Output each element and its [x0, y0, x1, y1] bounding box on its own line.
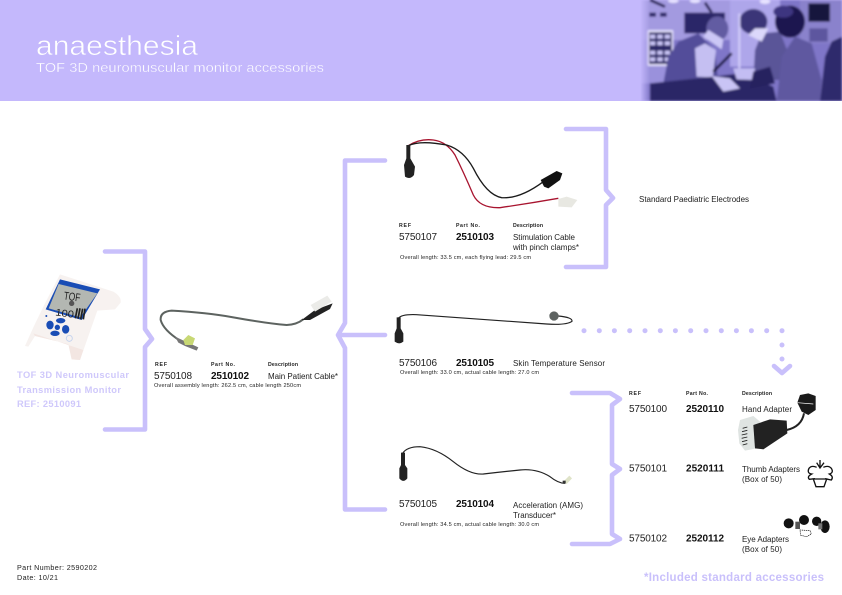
panel: main patient cable: Part No. [211, 362, 236, 368]
eye adapters row: 5750102 [629, 534, 667, 544]
icon: TOF 3D monitor device: TOF [63, 290, 81, 305]
panel: adapters [629, 391, 832, 554]
thumb adapters row: (Box of 50) [742, 475, 782, 484]
eye adapters row [629, 534, 789, 554]
panel: acceleration transducer: 2510104 [456, 499, 494, 510]
panel: main patient cable: 5750108 [154, 371, 192, 382]
panel: skin temperature sensor: 5750106 [399, 358, 437, 369]
icon: eye adapters [784, 515, 830, 537]
panel: main patient cable: Overall assembly length: 262.5 cm, cable length 250cm [154, 383, 301, 389]
text block: standard paediatric electrodes: Standard Paediatric Electrodes [639, 195, 749, 204]
panel: acceleration transducer: Transducer* [513, 511, 556, 520]
thumb adapters row: Thumb Adapters [742, 465, 800, 474]
panel: acceleration transducer: Acceleration (AMG) [513, 501, 583, 510]
header photo: operating theatre team [640, 0, 842, 101]
panel: stimulation cable [399, 140, 579, 261]
eye adapters row: 2520112 [686, 534, 724, 544]
panel: acceleration transducer: 5750105 [399, 499, 437, 510]
hand adapter row: 2520110 [686, 404, 724, 415]
header band [0, 0, 842, 101]
panel: skin temperature sensor: Skin Temperature Sensor [513, 359, 605, 368]
icon: stimulation cable with pinch clamps [404, 140, 577, 208]
panel: main patient cable: 2510102 [211, 371, 249, 382]
panel: skin temperature sensor [395, 311, 605, 376]
panel: stimulation cable: REF [399, 223, 411, 229]
panel: main patient cable [154, 296, 338, 389]
panel: stimulation cable: 5750107 [399, 232, 437, 243]
bracket: transducer to adapters [572, 393, 620, 544]
hand adapter row [629, 404, 792, 415]
monitor name and REF: REF: 2510091 [17, 399, 81, 409]
panel: main patient cable: Description [268, 362, 298, 368]
icon: main patient cable [161, 296, 333, 351]
hand adapter row: Hand Adapter [742, 405, 792, 414]
panel: acceleration transducer [399, 447, 583, 528]
monitor name and REF: Transmission Monitor [17, 385, 121, 395]
panel: main patient cable: REF [155, 362, 167, 368]
dotted arrow: temperature sensor to adapters [582, 328, 790, 373]
hand adapter row: 5750100 [629, 404, 667, 415]
bracket: stimulation cable to electrodes [566, 129, 613, 267]
icon: skin temperature sensor [395, 311, 572, 343]
eye adapters row: Eye Adapters [742, 535, 789, 544]
panel: stimulation cable: Description [513, 223, 543, 229]
panel: skin temperature sensor: Overall length: 33.0 cm, actual cable length: 27.0 cm [400, 370, 539, 376]
panel: adapters: Description [742, 391, 772, 397]
icon: TOF 3D monitor device: 100 [55, 307, 75, 321]
panel: main patient cable: Main Patient Cable* [268, 372, 338, 381]
icon: acceleration transducer [399, 447, 572, 484]
bracket: monitor to main cable [105, 252, 152, 430]
panel: stimulation cable: Overall length: 33.5 cm, each flying lead: 29.5 cm [400, 255, 531, 261]
panel: stimulation cable: with pinch clamps* [512, 243, 579, 252]
thumb adapters row: 5750101 [629, 464, 667, 474]
panel: adapters: Part No. [686, 391, 709, 397]
panel: skin temperature sensor: 2510105 [456, 358, 494, 369]
thumb adapters row [629, 464, 800, 484]
thumb adapters row: 2520111 [686, 464, 724, 474]
monitor name and REF: TOF 3D Neuromuscular [17, 370, 129, 380]
panel: adapters: REF [629, 391, 641, 397]
panel: stimulation cable: Part No. [456, 223, 481, 229]
icon: hand adapter [738, 393, 816, 451]
panel: acceleration transducer: Overall length: 34.5 cm, actual cable length: 30.0 cm [400, 522, 539, 528]
title: anaesthesia [36, 30, 198, 61]
footer: part number and date: Part Number: 2590202 [17, 563, 97, 572]
panel: stimulation cable: Stimulation Cable [513, 233, 576, 242]
footer: part number and date: Date: 10/21 [17, 573, 58, 582]
footnote: included standard accessories: *Included standard accessories [644, 572, 824, 584]
monitor name and REF [17, 370, 129, 409]
footer: part number and date [17, 563, 97, 582]
bracket: main branch to three accessories [338, 160, 385, 510]
eye adapters row: (Box of 50) [742, 545, 782, 554]
icon: thumb adapters [808, 460, 832, 487]
subtitle: TOF 3D neuromuscular monitor accessories [36, 60, 325, 75]
panel: stimulation cable: 2510103 [456, 232, 494, 243]
panel: monitor [17, 274, 129, 409]
icon: TOF 3D monitor device [25, 274, 121, 360]
